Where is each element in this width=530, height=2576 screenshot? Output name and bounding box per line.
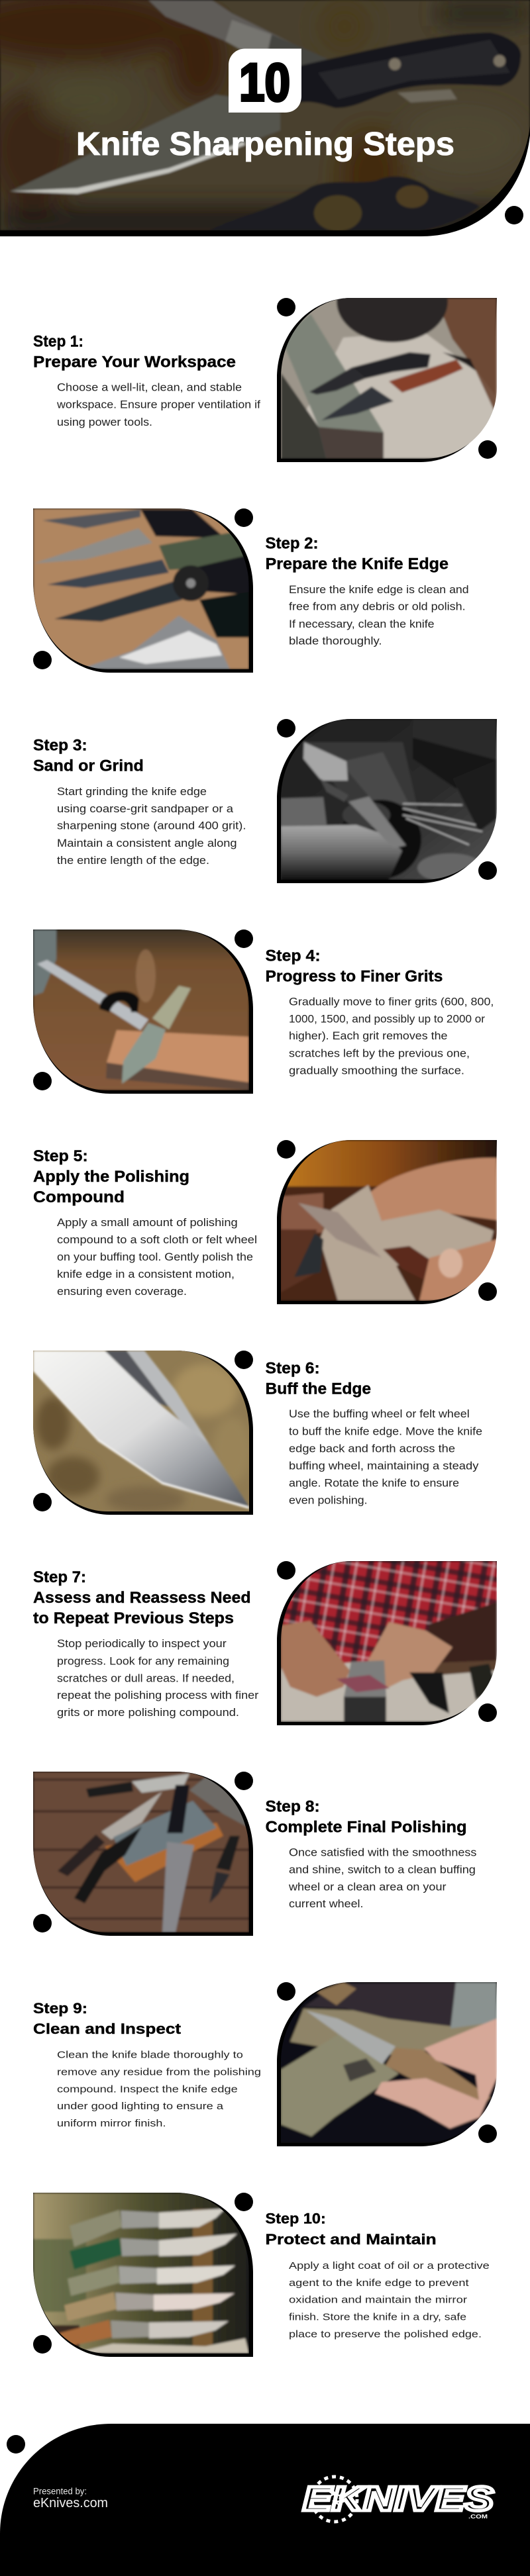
dot	[33, 1493, 52, 1511]
title number badge: 10	[239, 53, 290, 113]
body: step 8	[288, 1846, 476, 1910]
title: Knife Sharpening Steps	[76, 126, 454, 162]
body: step 3: Maintain a consistent angle along	[57, 837, 237, 849]
body: step 7: repeat the polishing process with finer	[57, 1689, 259, 1701]
body: step 6: angle. Rotate the knife to ensure	[289, 1476, 459, 1489]
body: step 5: ensuring even coverage.	[57, 1285, 187, 1298]
panel: step 4	[33, 930, 494, 1094]
body: step 7: progress. Look for any remaining	[57, 1654, 229, 1667]
dot	[478, 1703, 497, 1722]
dot	[235, 508, 253, 527]
heading: step 7: Assess and Reassess Need	[33, 1589, 251, 1607]
body: step 4: higher). Each grit removes the	[289, 1029, 448, 1042]
panel: step 2	[33, 508, 469, 673]
presenter credit: eKnives.com	[33, 2496, 108, 2510]
photo: two folding knives on a whetstone	[277, 298, 497, 462]
photo: knife in sharpening guide on a stone	[33, 930, 253, 1094]
body: step 9: remove any residue from the polishing	[57, 2067, 261, 2078]
dot	[235, 930, 253, 948]
body: step 10: agent to the knife edge to prevent	[289, 2277, 470, 2289]
photo: hand inspecting a tan serrated knife	[277, 1982, 497, 2146]
heading: step 1: Step 1:	[33, 332, 83, 350]
body: step 8: Once satisfied with the smoothness	[289, 1846, 476, 1858]
body: step 7: Stop periodically to inspect your	[57, 1637, 227, 1650]
heading: step 8	[265, 1797, 467, 1836]
panel: step 10	[33, 2193, 490, 2357]
dot	[505, 206, 523, 224]
heading: step 9: Step 9:	[33, 2000, 87, 2017]
body: step 4: gradually smoothing the surface.	[289, 1064, 464, 1076]
logo: eKnives	[303, 2477, 494, 2522]
photo: grinding a knife on a wheel	[277, 719, 497, 883]
dot	[277, 298, 295, 316]
body: step 6: buffing wheel, maintaining a steady	[289, 1460, 479, 1472]
dot	[277, 719, 295, 738]
body: step 3: Start grinding the knife edge	[57, 785, 207, 798]
dot	[235, 2193, 253, 2211]
logo: eKnives: .COM	[468, 2514, 488, 2520]
dot	[235, 1351, 253, 1369]
body: step 3: sharpening stone (around 400 grit).	[57, 820, 246, 832]
body: step 8: and shine, switch to a clean buffing	[289, 1863, 476, 1876]
body: step 5: knife edge in a consistent motion,	[57, 1268, 235, 1280]
heading: step 6	[265, 1359, 371, 1398]
panel: footer	[0, 2424, 530, 2576]
body: step 7: grits or more polishing compound.	[57, 1706, 239, 1719]
heading: step 7: to Repeat Previous Steps	[33, 1609, 234, 1627]
photo: rack of fixed-blade knives	[33, 2193, 253, 2357]
body: step 4: scratches left by the previous one,	[289, 1047, 470, 1059]
body: step 6	[289, 1407, 482, 1506]
heading: step 10: Step 10:	[265, 2210, 326, 2227]
heading: step 1	[33, 332, 236, 371]
body: step 3: using coarse-grit sandpaper or a	[57, 802, 234, 815]
body: step 9	[57, 2050, 261, 2129]
heading: step 10	[265, 2210, 437, 2248]
heading: step 9: Clean and Inspect	[33, 2021, 182, 2037]
heading: step 3: Sand or Grind	[33, 757, 144, 775]
body: step 9: under good lighting to ensure a	[57, 2101, 224, 2112]
body: step 8: wheel or a clean area on your	[288, 1880, 447, 1893]
dot	[235, 1772, 253, 1790]
body: step 5: Apply a small amount of polishing	[57, 1216, 238, 1229]
body: step 1	[56, 381, 260, 428]
photo: close-up of polished blade on stone	[33, 1351, 253, 1515]
body: step 6: Use the buffing wheel or felt wheel	[289, 1407, 470, 1420]
body: step 2: If necessary, clean the knife	[289, 618, 435, 630]
body: step 10: finish. Store the knife in a dry, safe	[289, 2312, 466, 2322]
panel: header	[0, 0, 530, 238]
panel: step 5	[33, 1140, 497, 1304]
body: step 10: oxidation and maintain the mirror	[289, 2294, 467, 2305]
dot	[33, 1072, 52, 1090]
panel: step 8	[33, 1772, 476, 1936]
photo: hands in plaid shirt sharpening on a stone	[277, 1561, 497, 1725]
body: step 9: Clean the knife blade thoroughly to	[57, 2050, 243, 2060]
dot	[7, 2435, 25, 2454]
body: step 7	[57, 1637, 259, 1719]
body: step 1: workspace. Ensure proper ventilation if	[56, 399, 260, 411]
dot	[277, 1561, 295, 1580]
dot	[478, 861, 497, 880]
heading: step 1: Prepare Your Workspace	[33, 353, 236, 371]
heading: step 5: Compound	[33, 1188, 125, 1206]
body: step 9: uniform mirror finish.	[57, 2118, 166, 2129]
heading: step 9	[33, 2000, 182, 2037]
body: step 1: Choose a well-lit, clean, and stable	[57, 381, 242, 394]
body: step 10: Apply a light coat of oil or a protective	[289, 2260, 490, 2271]
body: step 10: place to preserve the polished edge.	[289, 2329, 482, 2340]
panel: step 7	[33, 1561, 497, 1725]
body: step 3	[57, 785, 246, 867]
body: step 8: current wheel.	[289, 1897, 363, 1910]
dot	[33, 1914, 52, 1932]
heading: step 10: Protect and Maintain	[265, 2231, 437, 2248]
body: step 4: Gradually move to finer grits (600, 800,	[289, 995, 494, 1008]
dot	[478, 2124, 497, 2143]
heading: step 5: Step 5:	[33, 1147, 88, 1165]
presenter credit: Presented by:	[33, 2487, 87, 2497]
dot	[478, 1282, 497, 1301]
panel: step 6	[33, 1351, 482, 1515]
dot	[478, 440, 497, 459]
photo: row of folding knives on wood	[33, 508, 253, 673]
heading: step 3	[33, 736, 144, 775]
heading: step 4: Step 4:	[265, 947, 321, 965]
body: step 2: free from any debris or old polish.	[289, 600, 466, 613]
body: step 2: Ensure the knife edge is clean and	[289, 583, 469, 596]
header black backing shape	[0, 0, 530, 236]
heading: step 8: Complete Final Polishing	[265, 1818, 467, 1836]
heading: step 2: Step 2:	[265, 535, 318, 553]
heading: step 6: Step 6:	[265, 1359, 320, 1377]
body: step 6: to buff the knife edge. Move the knife	[289, 1425, 482, 1437]
header photo: knife on canvas	[0, 0, 530, 238]
photo: knives around a whetstone on dark wood	[33, 1772, 253, 1936]
heading: step 4	[265, 947, 443, 985]
heading: step 8: Step 8:	[265, 1797, 320, 1815]
panel: step 3	[33, 719, 497, 883]
dot	[33, 651, 52, 669]
heading: step 3: Step 3:	[33, 736, 87, 755]
heading: step 6: Buff the Edge	[265, 1380, 371, 1398]
body: step 2: blade thoroughly.	[289, 634, 382, 647]
body: step 5: compound to a soft cloth or felt wheel	[57, 1233, 257, 1246]
body: step 2	[289, 583, 469, 647]
body: step 6: even polishing.	[289, 1494, 368, 1506]
body: step 10	[289, 2260, 490, 2340]
heading: step 7: Step 7:	[33, 1568, 86, 1586]
panel: step 9	[33, 1982, 497, 2146]
body: step 4: 1000, 1500, and possibly up to 2000 or	[289, 1013, 485, 1025]
heading: step 4: Progress to Finer Grits	[265, 967, 443, 985]
photo: polishing a knife with a cloth	[277, 1140, 497, 1304]
body: step 6: edge back and forth across the	[289, 1442, 455, 1455]
body: step 5	[57, 1216, 257, 1298]
body: step 7: scratches or dull areas. If needed,	[57, 1672, 235, 1684]
presenter credit	[33, 2487, 108, 2510]
footer black shape	[0, 2424, 530, 2576]
dot	[277, 1140, 295, 1159]
body: step 1: using power tools.	[57, 416, 152, 428]
heading: step 5	[33, 1147, 189, 1206]
heading: step 5: Apply the Polishing	[33, 1168, 189, 1186]
panel: step 1	[33, 298, 497, 462]
heading: step 7	[33, 1568, 251, 1627]
dot	[277, 1982, 295, 2001]
heading: step 2	[265, 535, 449, 573]
body: step 9: compound. Inspect the knife edge	[57, 2084, 238, 2095]
dot	[33, 2335, 52, 2354]
heading: step 2: Prepare the Knife Edge	[265, 555, 449, 573]
body: step 5: on your buffing tool. Gently polish the	[57, 1251, 253, 1263]
body: step 3: the entire length of the edge.	[57, 854, 209, 867]
logo: eKnives: EKNIVES	[303, 2480, 494, 2518]
body: step 4	[289, 995, 494, 1076]
